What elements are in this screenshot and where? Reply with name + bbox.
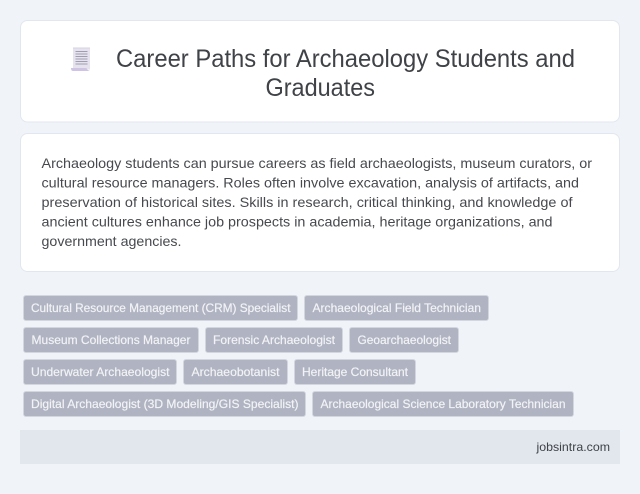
tag: digital archaeologist: Digital Archaeologist (3D Modeling/GIS Specialist) [31,397,298,411]
footer [20,430,620,464]
tag: CRM specialist: Cultural Resource Management (CRM) Specialist [31,301,291,315]
tag: museum collections manager [24,328,198,352]
tag: underwater archaeologist: Underwater Archaeologist [31,365,170,379]
icon: document scroll [71,48,90,71]
tag: heritage consultant [294,360,416,384]
footer: jobsintra.com [535,440,610,454]
tag: archaeobotanist: Archaeobotanist [192,365,280,379]
title: Graduates [266,74,375,102]
tag: field technician: Archaeological Field Technician [312,301,481,315]
text block: summary: cultural resource managers. Roles often involve excavation, analysis of artifacts, and [42,174,579,190]
tag: digital archaeologist [24,392,306,416]
text block: summary: government agencies. [42,233,182,249]
tag list [24,296,574,416]
text block: summary: ancient cultures enhance job prospects in academia, heritage organizations, and [42,214,552,230]
panel: title header [20,20,620,122]
tag: laboratory technician [312,392,574,416]
title: Career Paths for Archaeology Students and [116,45,575,73]
tag: heritage consultant: Heritage Consultant [302,365,409,379]
tag: geoarchaeologist [350,328,458,352]
tag: museum collections manager: Museum Collections Manager [32,333,190,347]
tag: laboratory technician: Archaeological Science Laboratory Technician [320,397,566,411]
tag: archaeobotanist [184,360,288,384]
tag: field technician [304,296,488,320]
text block: summary: Archaeology students can pursue careers as field archaeologists, museum curators, or [42,155,592,171]
tag: geoarchaeologist: Geoarchaeologist [358,333,452,347]
tag: forensic archaeologist: Forensic Archaeologist [213,333,336,347]
text block: summary [42,155,592,249]
title [116,45,575,102]
tag: forensic archaeologist [206,328,342,352]
text block: summary: preservation of historical sites. Skills in research, critical thinking, and knowledge of [42,194,573,210]
tag: CRM specialist [24,296,298,320]
panel: summary text [20,134,620,272]
tag: underwater archaeologist [24,360,176,384]
